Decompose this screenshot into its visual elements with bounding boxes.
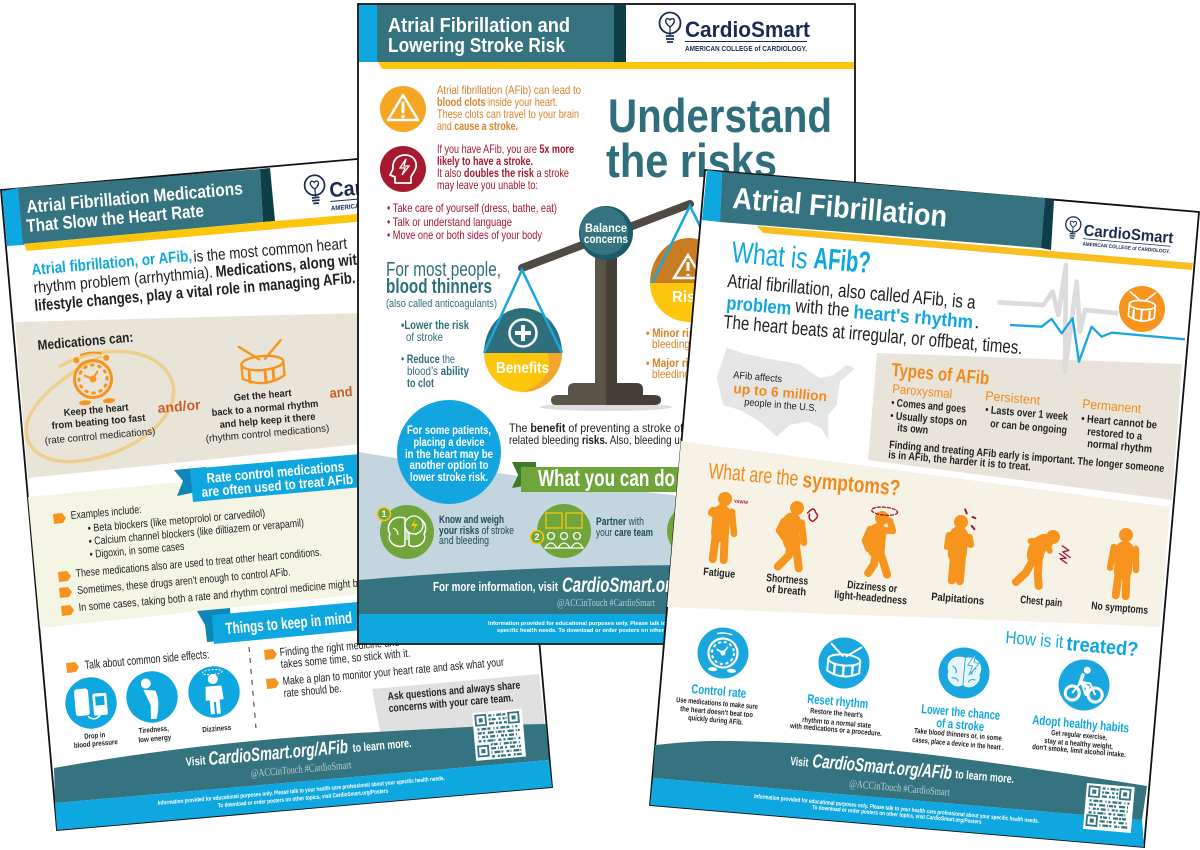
logo: CardioSmart: AMERICAN COLLEGE of CARDIOLOGY.	[1082, 241, 1171, 255]
step 2: partner with care team: your care team	[596, 527, 653, 539]
footer text: CardioSmart.org/AFib	[812, 751, 953, 784]
text: get the heart: (rhythm control medications)	[205, 423, 330, 445]
text: keep the heart: Keep the heart	[63, 402, 130, 419]
panel: rate control examples	[28, 470, 400, 628]
icon: drum in orange circle	[1117, 284, 1167, 334]
footer text: To download or order posters on other topics, visit CardioSmart.org/Posters	[218, 789, 389, 809]
footer text: @ACCinTouch #CardioSmart	[849, 778, 950, 799]
symptom: palpitations: Palpitations	[931, 591, 985, 608]
logo: CardioSmart	[660, 12, 811, 53]
title: Atrial Fibrillation and	[388, 15, 570, 37]
label: tiredness: Tiredness,	[138, 724, 169, 735]
heading: symptoms: symptoms?	[802, 467, 901, 501]
treatment: lower the chance of a stroke	[912, 645, 1004, 752]
symptom: dizziness	[834, 506, 908, 607]
title	[26, 178, 244, 236]
callout: ask questions	[372, 674, 545, 741]
symptom: shortness of breath	[766, 500, 819, 598]
footer text: Information provided for educational purposes only. Please talk to your health care professional about your specific health needs.	[754, 794, 1040, 825]
map: AFib affects: AFib affects	[733, 370, 783, 385]
icon: tiredness	[124, 669, 180, 725]
logo: CardioSmart: CardioSmart	[328, 169, 449, 202]
heading: how is it treated: treated?	[1066, 633, 1139, 661]
bullet list: examples: These medications also are used to treat other heart conditions.	[75, 547, 322, 580]
banner: rate control medications: are often used to treat AFib	[201, 471, 354, 500]
heading: what is AFib: What is	[730, 236, 809, 276]
text: 5x more likely: If you have AFib, you are 5x more	[437, 142, 574, 156]
bullet list: examples: • Calcium channel blockers (like diltiazem or verapamil)	[88, 517, 304, 548]
bullet list: stroke effects: • Take care of yourself (dress, bathe, eat)	[387, 201, 557, 215]
column: paroxysmal	[890, 381, 968, 437]
logo: CardioSmart: CardioSmart	[685, 17, 811, 42]
callout: device option: lower stroke risk.	[410, 470, 488, 484]
text: keep the heart	[44, 402, 156, 447]
icon: drum	[239, 340, 285, 385]
poster: lowering stroke risk	[358, 4, 855, 644]
heading: understand the risks: the risks	[606, 134, 777, 187]
heading: blood thinners: For most people,	[386, 259, 501, 281]
treatment: reset rhythm: rhythm to a normal state	[802, 715, 871, 730]
poster: medications that slow the heart rate	[1, 147, 552, 830]
pan: risks: Risks	[672, 289, 712, 306]
label: tiredness	[138, 724, 172, 744]
treatment: control rate: quickly during AFib.	[688, 713, 743, 727]
text: AFib definition	[723, 271, 1023, 359]
text: benefit statement: The benefit of preventing a stroke often outweighs	[509, 421, 749, 435]
label: and: and	[329, 383, 353, 401]
text: blood clots: These clots can travel to your brain	[437, 107, 579, 121]
bullet list: benefits	[401, 318, 469, 390]
heading: how is it treated	[1005, 627, 1139, 661]
treatment: reset rhythm: with medications or a procedure.	[789, 721, 882, 738]
icon: alarm clock	[72, 351, 115, 406]
heading: understand the risks: Understand	[608, 89, 832, 142]
symptom: dizziness: light-headedness	[834, 589, 908, 607]
step 2: partner with care team	[530, 504, 653, 558]
step 1: know your risks: 1	[381, 509, 387, 519]
treatment: control rate: Control rate	[691, 681, 747, 701]
text: benefit statement	[509, 421, 749, 447]
bullet list: stroke effects: • Talk or understand language	[387, 215, 512, 229]
callout: device option: another option to	[410, 458, 488, 472]
text: side effects heading: Talk about common side effects:	[84, 647, 210, 672]
icon: drop in blood pressure	[63, 675, 119, 731]
bullet list: risks: • Major risk of	[646, 356, 713, 370]
QR code	[472, 709, 526, 761]
panel: medications can	[15, 312, 400, 478]
heading: types of AFib: Types of AFib	[891, 360, 990, 390]
column: persistent: Persistent	[985, 388, 1041, 408]
map: AFib affects	[717, 348, 855, 440]
bullet list: examples: • Beta blockers (like metoprolol or carvedilol)	[87, 508, 266, 535]
symptom: no symptoms: No symptoms	[1091, 600, 1149, 617]
banner: things to keep in mind	[197, 600, 383, 644]
callout: ask questions: Ask questions and always share	[387, 679, 521, 703]
bullet list: risks: bleeding	[652, 337, 690, 351]
label: drop in blood pressure: blood pressure	[73, 737, 118, 750]
treatment: lower the chance of a stroke: Lower the chance	[921, 701, 1001, 723]
banner: what you can do	[512, 462, 761, 492]
heading: symptoms: What are the	[708, 458, 799, 491]
logo: CardioSmart	[304, 164, 450, 215]
bullet list: benefits: •Lower the risk	[401, 318, 469, 332]
symptom: shortness of breath: Shortness	[766, 572, 809, 588]
treatment: control rate: the heart doesn't beat too	[680, 704, 754, 719]
footer text: To download or order posters on other topics, visit CardioSmart.org/Posters	[812, 805, 982, 826]
footer text: to learn more.	[955, 767, 1015, 786]
label: drop in blood pressure	[73, 730, 118, 750]
chart: balance scale	[484, 204, 728, 411]
footer band	[359, 565, 854, 643]
logo: CardioSmart: CardioSmart	[1083, 222, 1175, 247]
text: things to keep in mind	[264, 637, 505, 700]
pan: benefits: Benefits	[496, 360, 549, 377]
footer text: Visit	[790, 754, 809, 770]
treatment: adopt healthy habits: don't smoke, limit alcohol intake.	[1032, 742, 1126, 759]
treatment: adopt healthy habits: Adopt healthy habits	[1032, 712, 1130, 735]
icon: warning	[380, 86, 426, 132]
bullet list: stroke effects: • Move one or both sides of your body	[387, 228, 542, 242]
footer text: For more information, visit	[433, 579, 559, 594]
column: permanent: normal rhythm	[1087, 438, 1153, 456]
bullet list: benefits: to clot	[407, 376, 434, 390]
treatment: lower the chance of a stroke: of a stroke	[936, 715, 985, 734]
text: things to keep in mind: rate should be.	[283, 683, 342, 700]
step 1: know your risks: and bleeding	[439, 535, 489, 547]
footer text: Information provided for educational purposes only. Please talk to your health care professional about your specific health needs.	[158, 776, 445, 807]
bullet list: risks: • Minor risk of	[646, 326, 713, 340]
header band	[359, 5, 854, 69]
bullet list: examples: In some cases, taking both a rate and rhythm control medicine might be	[78, 577, 363, 614]
title: Atrial Fibrillation Medications	[26, 178, 244, 217]
column: paroxysmal: • Usually stops on	[890, 410, 968, 429]
panel: types of AFib	[868, 353, 1182, 500]
column: permanent: restored to a	[1087, 426, 1143, 443]
heading: what is AFib: AFib?	[812, 242, 872, 280]
callout: device option: in the heart may be	[405, 447, 493, 461]
map: AFib affects: up to 6 million	[733, 380, 828, 404]
symptom: fatigue	[703, 491, 750, 581]
label: drop in blood pressure: Drop in	[84, 730, 106, 741]
text: get the heart: Get the heart	[233, 388, 293, 404]
intro text: Atrial fibrillation, or AFib,	[31, 248, 193, 279]
map: AFib affects: people in the U.S.	[744, 397, 817, 414]
heading: blood thinners: blood thinners	[386, 276, 492, 298]
treatment: reset rhythm: Restore the heart's	[810, 706, 863, 720]
column: permanent: Permanent	[1082, 396, 1142, 416]
text: get the heart	[205, 388, 330, 445]
step 1: know your risks: Know and weigh	[439, 514, 504, 526]
text: side effects heading	[66, 647, 210, 673]
text: blood clots	[437, 83, 581, 133]
step 1: know your risks	[378, 505, 514, 559]
QR code	[1083, 783, 1135, 833]
footer text: CardioSmart.org	[562, 574, 680, 597]
title	[388, 15, 570, 57]
header band	[2, 168, 491, 251]
callout: ask questions: concerns with your care team.	[388, 692, 514, 715]
text: things to keep in mind: Finding the right medicine and	[279, 637, 400, 659]
callout: device option	[397, 400, 501, 504]
banner: rate control medications: Rate control medications	[206, 458, 345, 486]
intro text: rhythm problem (arrhythmia).	[33, 264, 214, 297]
text: AFib definition: .	[974, 312, 981, 333]
treatment: adopt healthy habits	[1032, 657, 1130, 759]
poster: atrial fibrillation overview	[650, 170, 1199, 847]
banner: rate control medications	[174, 454, 363, 502]
banner: what you can do: What you can do	[538, 465, 675, 491]
title: That Slow the Heart Rate	[26, 201, 205, 236]
column: paroxysmal: • Comes and goes	[891, 397, 966, 416]
symptom: dizziness: Dizziness or	[847, 579, 898, 595]
text: 5x more likely: may leave you unable to:	[437, 178, 538, 192]
bullet list: benefits: blood’s ability	[407, 364, 469, 378]
icon: dizziness	[186, 664, 242, 720]
column: persistent	[985, 388, 1069, 437]
step 2: partner with care team: Partner with	[596, 516, 644, 528]
symptom: no symptoms	[1091, 527, 1149, 617]
text: benefit statement: related bleeding risks. Also, bleeding usually	[509, 433, 705, 447]
column: persistent: • Lasts over 1 week	[985, 404, 1069, 423]
hand drawn circle highlight	[26, 351, 174, 462]
label: and/or: and/or	[157, 396, 202, 416]
background: pale blue wave	[359, 452, 854, 600]
text: AFib definition: heart's rhythm	[853, 302, 974, 333]
column: paroxysmal: its own	[897, 422, 929, 437]
text: AFib definition: Atrial fibrillation, also called AFib, is a	[727, 271, 977, 314]
bullet list: risks: bleeding	[652, 367, 690, 381]
treatment: reset rhythm: Reset rhythm	[807, 691, 869, 711]
intro text	[31, 236, 366, 315]
text: 5x more likely	[437, 142, 574, 192]
column: persistent: or can be ongoing	[990, 418, 1067, 437]
column: paroxysmal: Paroxysmal	[892, 381, 953, 401]
symptom: chest pain: Chest pain	[1020, 594, 1063, 610]
text: get the heart: back to a normal rhythm	[211, 399, 319, 419]
footer text	[433, 574, 779, 634]
bullet list: stroke effects	[387, 201, 557, 242]
panel: symptoms background	[667, 441, 1170, 627]
footer text: @ACCinTouch #CardioSmart	[250, 759, 352, 780]
intro text: lifestyle changes, play a vital role in managing AFib.	[34, 270, 356, 315]
step 2: partner with care team: 2	[534, 532, 540, 542]
treatment: control rate: Use medications to make sure	[676, 695, 758, 711]
label: tiredness: low energy	[138, 733, 172, 744]
symptom: fatigue: YAWN!	[734, 499, 749, 505]
footer text: specific health needs. To download or order posters on other topics, visit CardioSmart.org/Posters	[497, 628, 767, 634]
footer text	[754, 751, 1040, 826]
text: finding and treating AFib early: is in AFib, the harder it is to treat.	[888, 449, 1031, 473]
treatment: lower the chance of a stroke: cases, place a device in the heart .	[912, 735, 1004, 752]
footer text: Information provided for educational purposes only. Please talk to your health care professional about your	[488, 621, 779, 627]
heading: blood thinners: (also called anticoagulants)	[386, 298, 497, 310]
symptom: chest pain	[1016, 527, 1073, 610]
column: permanent: • Heart cannot be	[1081, 413, 1157, 432]
footer text: @ACCinTouch #CardioSmart	[557, 598, 655, 609]
heading: how is it treated: How is it	[1005, 627, 1064, 652]
text: blood clots: Atrial fibrillation (AFib) can lead to	[437, 83, 581, 97]
logo: CardioSmart: AMERICAN COLLEGE of CARDIOLOGY.	[331, 195, 447, 213]
symptom: palpitations	[931, 508, 985, 608]
footer text: Visit	[185, 753, 206, 769]
chart: ECG line	[998, 265, 1185, 372]
treatment: adopt healthy habits: Get regular exercise,	[1051, 728, 1107, 742]
footer text: CardioSmart.org/AFib	[208, 737, 349, 770]
bullet list: examples: • Digoxin, in some cases	[89, 541, 185, 561]
heading: symptoms	[708, 458, 901, 501]
hub: balance concerns: concerns	[584, 232, 628, 246]
bullet list: examples: Examples include:	[70, 504, 142, 522]
bullet list: examples: Sometimes, these drugs aren't enough to control AFib.	[77, 566, 291, 597]
hub: balance concerns	[579, 206, 633, 260]
bullet list: examples	[53, 504, 363, 616]
treatment: lower the chance of a stroke: Take blood thinners or, in some	[914, 726, 1002, 743]
footer text: to learn more.	[352, 736, 412, 755]
text: AFib definition: problem	[726, 293, 792, 320]
title: Atrial Fibrillation	[731, 182, 948, 234]
heading: blood thinners	[386, 259, 501, 310]
callout: device option: placing a device	[414, 435, 485, 449]
footer text	[158, 736, 445, 809]
text: keep the heart: (rate control medications)	[44, 426, 156, 447]
step 3 circle	[667, 504, 721, 558]
bullet list: benefits: • Reduce the	[401, 352, 455, 366]
text: AFib definition: with the	[794, 296, 850, 322]
bullet list: risks	[646, 326, 713, 381]
pan: benefits	[484, 270, 562, 392]
text: 5x more likely: likely to have a stroke.	[437, 154, 533, 168]
intro text: Medications, along with	[215, 251, 366, 281]
text: keep the heart: from beating too fast	[51, 413, 147, 432]
intro text: is the most common heart	[193, 236, 348, 266]
text: blood clots: and cause a stroke.	[437, 119, 518, 133]
logo: CardioSmart	[1064, 216, 1175, 255]
text: things to keep in mind: takes some time, so stick with it.	[280, 648, 411, 671]
text: blood clots: blood clots inside your heart.	[437, 95, 558, 109]
hub: balance concerns: Balance	[585, 221, 627, 235]
text: AFib definition: The heart beats at irregular, or offbeat, times.	[723, 312, 1023, 359]
treatment: control rate	[676, 625, 758, 727]
bullet list: benefits: of stroke	[406, 330, 443, 344]
symptom: fatigue: Fatigue	[703, 566, 736, 581]
header band	[702, 170, 1193, 270]
pan: risks	[650, 206, 728, 322]
icon: head with lightning	[380, 146, 426, 192]
heading: medications can: Medications can:	[37, 329, 134, 353]
label: dizziness: Dizziness	[202, 723, 232, 734]
title: Lowering Stroke Risk	[388, 35, 566, 57]
step 1: know your risks: your risks of stroke	[439, 525, 514, 537]
logo: CardioSmart: AMERICAN COLLEGE of CARDIOLOGY.	[685, 46, 807, 53]
treatment: reset rhythm	[789, 635, 882, 738]
text: things to keep in mind: Make a plan to monitor your heart rate and ask what your	[282, 657, 505, 688]
banner: things to keep in mind: Things to keep in mind	[225, 610, 353, 638]
heading: what is AFib	[730, 236, 872, 280]
column: permanent	[1081, 396, 1157, 456]
text: 5x more likely: It also doubles the risk a stroke	[437, 166, 569, 180]
heading: understand the risks	[606, 89, 832, 187]
footer band	[54, 724, 552, 830]
footer band	[650, 741, 1147, 847]
symptom: shortness of breath: of breath	[766, 583, 807, 598]
text: get the heart: and help keep it there	[219, 412, 316, 431]
callout: device option: For some patients,	[407, 423, 491, 437]
treatment: adopt healthy habits: stay at a healthy weight,	[1044, 736, 1113, 751]
